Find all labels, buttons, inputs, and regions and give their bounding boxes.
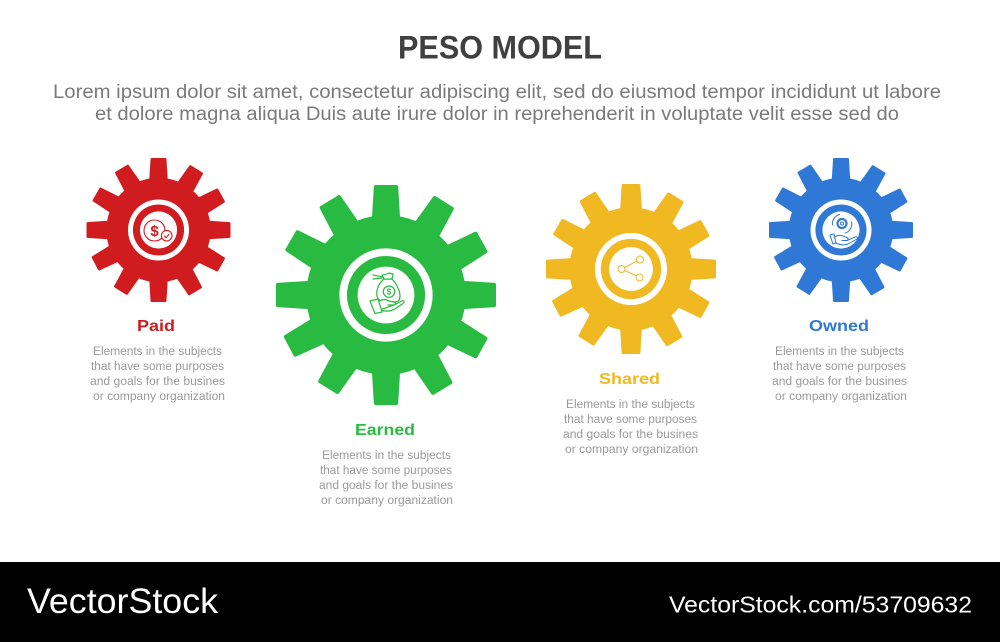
description: shared: that have some purposes — [564, 414, 697, 426]
footer url text: VectorStock.com/53709632 — [669, 592, 972, 618]
icon: share nodes — [618, 256, 644, 281]
description: owned: or company organization — [775, 391, 907, 403]
icon: cog on hand — [830, 214, 857, 245]
panel: earned — [276, 185, 496, 507]
gear: owned — [769, 158, 913, 302]
subtitle text — [53, 82, 941, 125]
gear: shared — [546, 184, 716, 354]
icon: dollar coin with check: $ — [150, 223, 159, 240]
icon: money bag on hand — [370, 273, 404, 314]
description: owned: and goals for the busines — [772, 376, 907, 388]
description: shared: Elements in the subjects — [566, 399, 695, 411]
subtitle text: et dolore magna aliqua Duis aute irure dolor in reprehenderit in voluptate velit esse sed do — [95, 104, 899, 125]
subtitle text: Lorem ipsum dolor sit amet, consectetur adipiscing elit, sed do eiusmod tempor incididunt ut labore — [53, 82, 941, 103]
description: paid: or company organization — [93, 391, 225, 403]
description: owned: Elements in the subjects — [775, 346, 904, 358]
description: paid — [90, 346, 225, 403]
footer bar — [0, 562, 1000, 642]
heading: shared: Shared — [599, 371, 660, 388]
title: PESO MODEL — [398, 30, 602, 66]
panel: owned — [769, 158, 913, 403]
gear: earned — [276, 185, 496, 405]
description: shared: or company organization — [565, 444, 698, 456]
description: earned — [319, 450, 453, 507]
description: shared — [563, 399, 698, 456]
heading: owned: Owned — [809, 318, 869, 335]
description: earned: and goals for the busines — [319, 480, 453, 492]
gear: paid — [86, 158, 231, 302]
heading: paid: Paid — [137, 318, 175, 335]
panel: paid — [86, 158, 231, 403]
description: owned: that have some purposes — [773, 361, 906, 373]
description: earned: or company organization — [321, 495, 453, 507]
panel: shared — [546, 184, 716, 456]
description: owned — [772, 346, 907, 403]
panel: earned: $ — [387, 288, 392, 296]
description: paid: Elements in the subjects — [93, 346, 222, 358]
description: earned: Elements in the subjects — [322, 450, 451, 462]
description: paid: and goals for the busines — [90, 376, 225, 388]
footer logo text: VectorStock — [27, 582, 219, 621]
icon: dollar coin with check — [144, 220, 172, 241]
description: shared: and goals for the busines — [563, 429, 698, 441]
description: earned: that have some purposes — [320, 465, 452, 477]
heading: earned: Earned — [355, 422, 415, 439]
description: paid: that have some purposes — [91, 361, 224, 373]
